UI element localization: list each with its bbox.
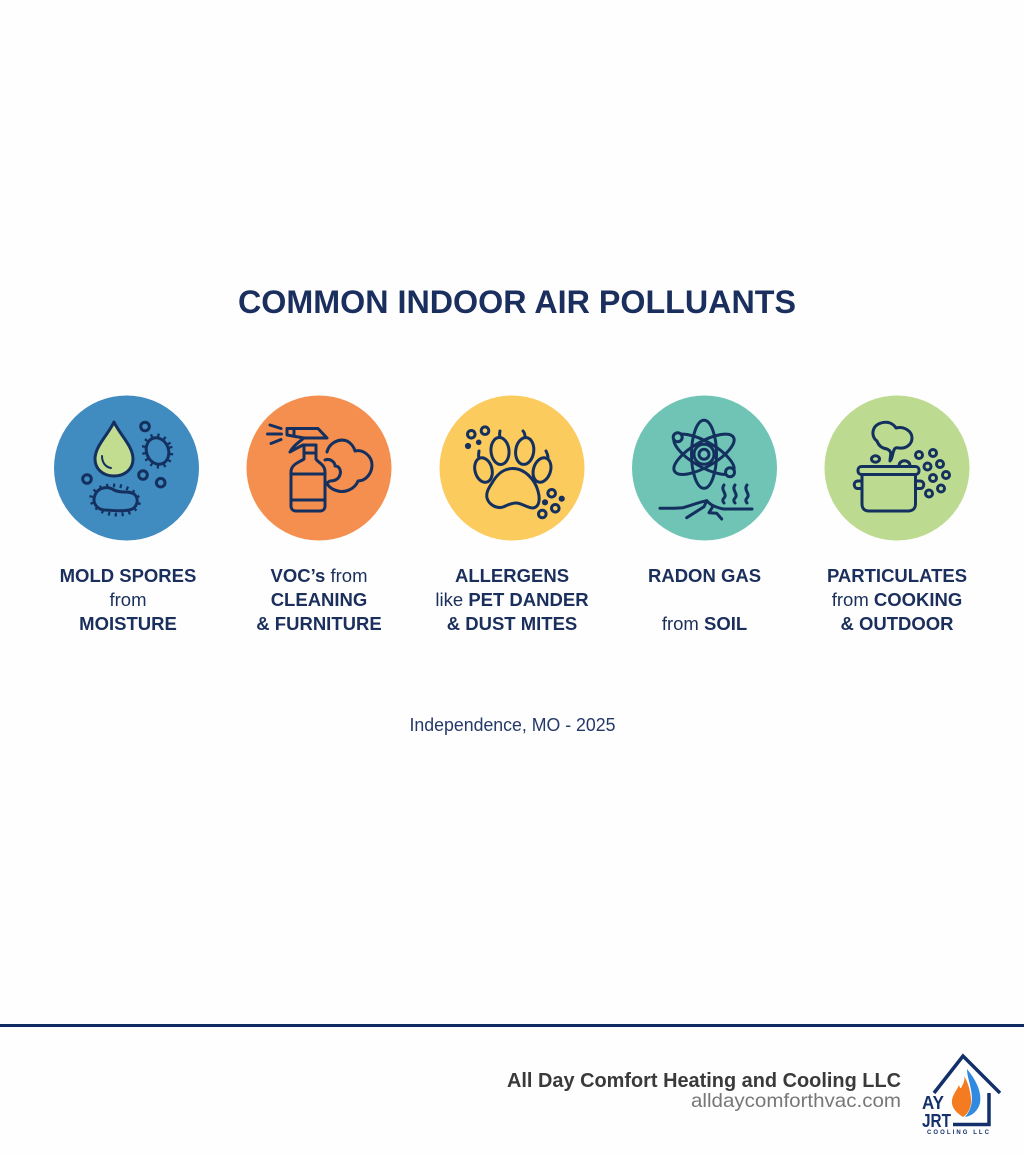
footer website: alldaycomforthvac.com	[691, 1090, 901, 1112]
label: allergens: like PET DANDER	[435, 589, 589, 610]
icon: spray bottle circle	[246, 396, 392, 540]
icon: cooking pot circle	[824, 396, 970, 540]
label: radon: from SOIL	[662, 613, 747, 634]
footer company name: All Day Comfort Heating and Cooling LLC	[507, 1070, 901, 1092]
logo	[922, 1056, 1000, 1136]
logo: text cooling: COOLING LLC	[927, 1130, 990, 1136]
footer rule	[0, 1024, 1024, 1027]
location and year: Independence, MO - 2025	[410, 715, 616, 735]
label: VOCs: CLEANING	[271, 589, 367, 610]
logo: orange flame	[952, 1076, 971, 1117]
label: radon: RADON GAS	[648, 565, 761, 586]
panel: allergens	[435, 396, 589, 634]
label: allergens: ALLERGENS	[455, 565, 569, 586]
label: particulates: & OUTDOOR	[840, 613, 954, 634]
label: particulates: from COOKING	[832, 589, 962, 610]
label: mold spores: MOLD SPORES	[60, 565, 196, 586]
label: mold spores: from	[110, 589, 146, 610]
icon: paw circle	[440, 396, 584, 540]
panel: mold spores	[54, 396, 199, 634]
title: COMMON INDOOR AIR POLLUANTS	[238, 284, 796, 320]
logo: blue flame	[965, 1069, 980, 1117]
label: VOCs: VOC’s from	[271, 565, 367, 586]
label: mold spores: MOISTURE	[79, 613, 177, 634]
panel: radon	[632, 396, 777, 634]
label: VOCs: & FURNITURE	[256, 613, 382, 634]
label: allergens: & DUST MITES	[447, 613, 577, 634]
panel: particulates	[824, 396, 970, 634]
logo: text ORT: JRT	[922, 1111, 951, 1131]
panel: VOCs	[246, 396, 392, 634]
icon: atom circle	[632, 396, 777, 540]
logo: text AY: AY	[922, 1093, 944, 1113]
icon: mold spores circle	[54, 396, 199, 540]
logo: house roof and wall	[934, 1056, 1000, 1124]
label: particulates: PARTICULATES	[827, 565, 967, 586]
